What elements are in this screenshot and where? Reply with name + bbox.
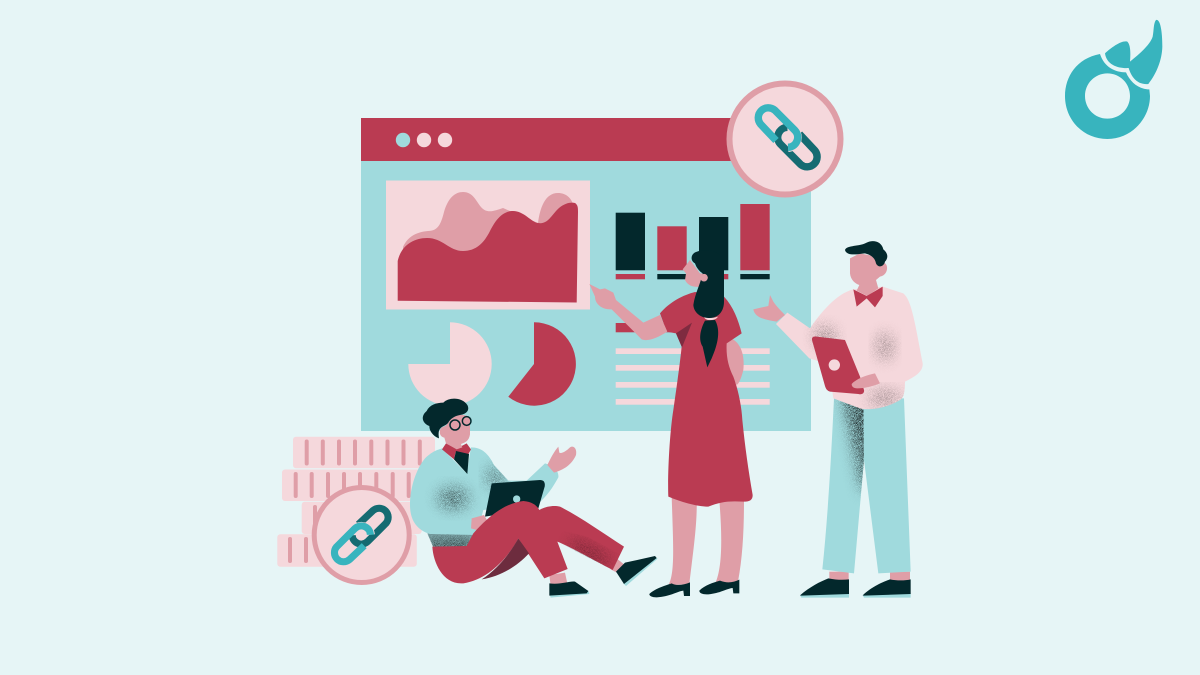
link badge bottom — [314, 488, 409, 582]
sweater shading — [438, 467, 502, 508]
link badge top — [730, 84, 840, 194]
back arm — [723, 337, 744, 385]
legs — [668, 497, 744, 585]
trouser shading — [843, 390, 873, 490]
logo ring — [1065, 54, 1150, 139]
text lines — [616, 323, 770, 405]
glasses — [450, 417, 471, 430]
window title bar — [361, 118, 811, 161]
logo horn — [1105, 20, 1162, 84]
dress — [660, 292, 753, 507]
seated man — [410, 399, 658, 598]
hand raised — [547, 447, 576, 473]
hair — [845, 241, 887, 266]
sweater hem — [428, 533, 472, 547]
bar chart — [616, 204, 770, 279]
logo — [1065, 20, 1162, 139]
laptop — [485, 480, 545, 517]
shoes — [649, 580, 739, 597]
window body — [361, 161, 811, 431]
sweater shading — [815, 327, 902, 406]
standing man — [753, 241, 923, 598]
shirt — [454, 451, 469, 474]
collar — [853, 287, 883, 307]
shoes — [800, 578, 911, 598]
pie chart red — [508, 322, 576, 406]
browser window — [361, 118, 811, 431]
window dots — [396, 133, 452, 147]
standing woman — [589, 250, 753, 597]
leg shadow — [482, 538, 529, 579]
sweater — [776, 287, 923, 409]
collar — [442, 443, 471, 459]
ankles — [549, 558, 626, 586]
neck and head — [440, 415, 470, 449]
hair — [692, 250, 724, 318]
sweater — [410, 447, 558, 535]
shoes — [549, 556, 658, 598]
ankles — [829, 572, 910, 581]
ponytail — [700, 320, 718, 367]
head — [850, 253, 887, 296]
pants shading — [567, 537, 613, 570]
open hand — [753, 295, 785, 322]
ear — [700, 274, 708, 281]
face — [683, 260, 708, 287]
hair — [423, 399, 468, 438]
coin 2 — [282, 470, 420, 501]
trousers — [822, 398, 911, 573]
coin stack — [277, 437, 435, 567]
icon: chain link — [334, 508, 388, 562]
pointing arm — [589, 284, 667, 340]
area chart — [386, 180, 590, 310]
icon: chain link — [758, 108, 817, 167]
coin 3 — [302, 502, 422, 534]
hair tie — [704, 317, 718, 320]
tablet — [812, 336, 864, 394]
coin 1 — [293, 437, 435, 468]
dress shadow — [676, 323, 692, 347]
hand on tablet — [852, 373, 880, 388]
pie chart pink — [408, 322, 492, 406]
hand on knee — [471, 515, 487, 530]
pants — [432, 501, 624, 583]
coin 4 — [277, 534, 417, 567]
